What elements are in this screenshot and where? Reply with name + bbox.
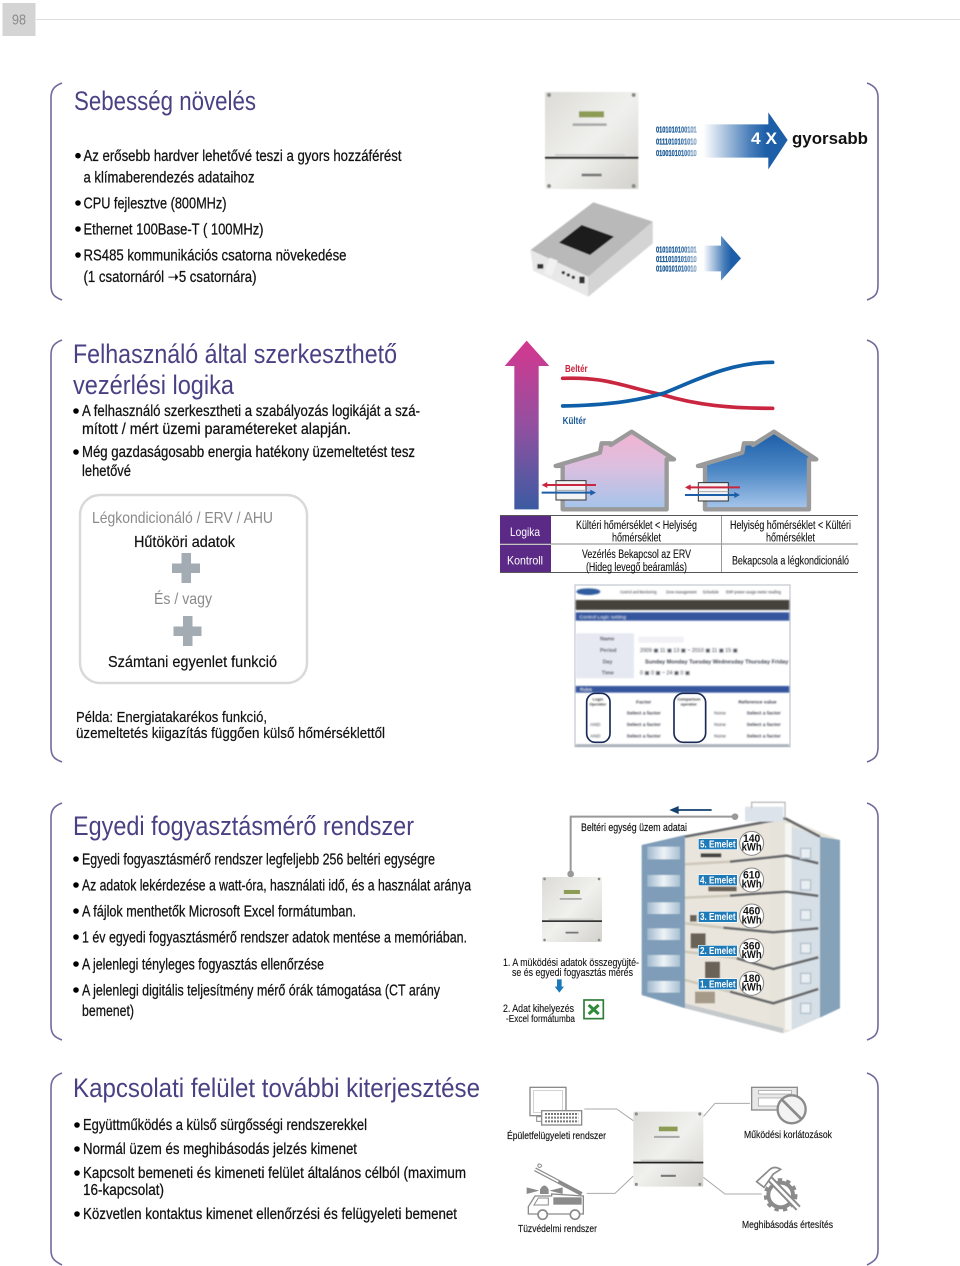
floor 1 reading <box>698 971 764 995</box>
floor 2 reading: 360 <box>743 940 760 952</box>
screenshot: control logic web page: Select a factor <box>627 722 661 728</box>
text block: metering bullets: Az adatok lekérdezése a watt-óra, használati idő, és a használat aránya <box>82 878 471 894</box>
floor 3 reading <box>698 904 764 928</box>
icon: house with air conditioner <box>685 432 816 509</box>
text block: metering bullets: 1 év egyedi fogyasztásmérő rendszer adatok mentése a memóriában. <box>82 930 467 946</box>
floor 4 reading: kWh <box>742 878 762 890</box>
text block: metering bullets: A fájlok menthetők Microsoft Excel formátumban. <box>82 904 356 920</box>
icon: controller small <box>542 877 602 942</box>
text block: logic bullets: Még gazdaságosabb energia hatékony üzemeltetést tesz <box>82 444 415 461</box>
screenshot: control logic web page: Sunday Monday Tuesday Wednesday Thursday Friday <box>645 659 788 665</box>
page number <box>2 3 960 36</box>
heading: individual metering: Egyedi fogyasztásmérő rendszer <box>73 811 414 841</box>
label: indoor: Beltér <box>565 364 588 375</box>
panel: individual metering <box>51 802 878 1040</box>
text block: metering bullets: bemenet) <box>82 1003 134 1020</box>
text block: step 1 <box>503 957 639 979</box>
rounded box: inputs: És / vagy <box>154 589 212 608</box>
floor 1 reading: kWh <box>742 982 762 994</box>
text block: example <box>76 709 385 742</box>
screenshot: control logic web page: None <box>714 722 726 728</box>
text block: logic bullets: mított / mért üzemi paramétereket alapján. <box>82 421 351 438</box>
text block: metering bullets: A jelenlegi digitális teljesítmény mérő órák támogatása (CT arány <box>82 982 440 1000</box>
curve: outdoor temperature <box>563 362 773 406</box>
chart: temperature logic diagram <box>505 341 816 509</box>
binary data stream top: 0111010101010 <box>656 136 697 147</box>
heading: user editable logic <box>73 339 397 400</box>
rounded box: inputs: Számtani egyenlet funkció <box>108 654 277 671</box>
screenshot: control logic web page: Reference value <box>738 699 777 705</box>
screenshot: control logic web page: Control and Monitoring <box>620 589 657 594</box>
text block: example: Példa: Energiatakarékos funkció, <box>76 709 267 726</box>
label: building management: Épületfelügyeleti rendszer <box>507 1129 606 1142</box>
screenshot: control logic web page: Operator <box>589 701 607 706</box>
icon: old controller box <box>531 202 653 297</box>
text block: metering bullets <box>73 852 471 1020</box>
icon: fault tools <box>757 1168 798 1210</box>
floor 4 reading <box>698 868 764 892</box>
floor 5 reading: kWh <box>742 842 762 854</box>
floor readings <box>698 831 764 995</box>
label: fire protection: Tüzvédelmi rendszer <box>518 1223 597 1235</box>
panel: interface extension <box>51 1073 878 1265</box>
text block: speed bullets: Ethernet 100Base-T ( 100MHz) <box>84 222 264 238</box>
text block: speed bullets: (1 csatornáról ➝5 csatornára) <box>84 269 256 286</box>
screenshot: control logic web page: Time <box>602 671 614 677</box>
label: fault notification: Meghibásodás értesítés <box>742 1219 833 1231</box>
icon: house with ERV <box>542 432 674 509</box>
screenshot: control logic web page: 2009 ▣ 11 ▣ 13 ▣ ~ 2010 ▣ 11 ▣ 15 ▣ <box>640 648 738 654</box>
text block: interface bullets: Kapcsolt bemeneti és kimeneti felület általános célból (maximum <box>83 1165 466 1182</box>
text block: step 1: 1. A müködési adatok összegyüjté- <box>503 957 639 969</box>
binary data stream top: 0101010100101 <box>656 124 697 135</box>
binary data stream top: 0100101010010 <box>656 148 697 158</box>
floor 2 reading: kWh <box>742 949 762 961</box>
floor 5 reading: 140 <box>743 833 760 845</box>
text block: speed bullets: Az erősebb hardver lehetővé teszi a gyors hozzáférést <box>84 148 402 165</box>
panel: speed increase <box>51 83 878 300</box>
text block: logic bullets: A felhasználó szerkesztheti a szabályozás logikáját a szá- <box>82 403 420 420</box>
table: logic and control: Helyiség hőmérséklet < Kültéri <box>730 520 851 532</box>
text block: speed bullets: RS485 kommunikációs csatorna növekedése <box>84 248 346 264</box>
binary data stream bottom: 0100101010010 <box>656 263 697 274</box>
icon: wall controller <box>545 92 638 189</box>
binary data stream bottom: 0101010100101 <box>656 244 697 255</box>
table: logic and control: Logika <box>510 525 540 539</box>
text block: interface bullets: Normál üzem és meghibásodás jelzés kimenet <box>83 1141 358 1158</box>
screenshot: control logic web page: Name <box>600 637 615 643</box>
rounded box: inputs <box>80 495 307 683</box>
icon: computer <box>530 1087 582 1125</box>
screenshot: control logic web page: EHP power usage meter reading <box>726 589 781 594</box>
heading: user editable logic: Felhasználó által szerkeszthető <box>73 339 397 369</box>
table: logic and control: Kültéri hőmérséklet < Helyiség <box>576 520 697 532</box>
screenshot: control logic web page: AND <box>590 722 601 728</box>
screenshot: control logic web page <box>575 585 790 747</box>
screenshot: control logic web page: Select a factor <box>747 711 781 717</box>
heading: speed increase: Sebesség növelés <box>74 86 256 116</box>
text block: step 2 <box>503 1003 575 1025</box>
icon: data line with arrow <box>567 806 738 877</box>
screenshot: control logic web page: Select a factor <box>747 733 781 739</box>
arrow: temperature axis <box>505 341 549 509</box>
floor 3 reading: kWh <box>742 914 762 926</box>
icon: operation restricted <box>752 1087 806 1123</box>
screenshot: control logic web page: Control Logic setting <box>579 614 626 620</box>
icon: download arrow <box>555 979 564 993</box>
curve: indoor temperature <box>563 378 773 408</box>
arrow: 4x faster: 4 X <box>751 129 778 148</box>
binary data stream top <box>656 124 697 158</box>
text block: speed bullets: a klímaberendezés adataihoz <box>84 170 254 186</box>
screenshot: control logic web page: Rules <box>580 687 593 692</box>
text block: speed bullets <box>75 148 402 286</box>
label: faster: gyorsabb <box>792 129 868 148</box>
table: logic and control: Vezérlés Bekapcsol az ERV <box>582 549 691 561</box>
floor 3 reading: 460 <box>743 906 760 918</box>
text block: speed bullets: CPU fejlesztve (800MHz) <box>84 196 226 212</box>
label: outdoor: Kültér <box>563 416 586 427</box>
heading: interface extension: Kapcsolati felület további kiterjesztése <box>73 1073 480 1103</box>
screenshot: control logic web page: Schedule <box>703 589 719 594</box>
text block: logic bullets: lehetővé <box>82 463 131 480</box>
floor 1 reading: 180 <box>743 973 760 985</box>
floor 2 reading <box>698 939 764 963</box>
table: logic and control: (Hideg levegő beáramlás) <box>586 562 687 574</box>
icon: excel <box>584 1000 603 1019</box>
diagram: controller connections <box>527 1087 806 1219</box>
text block: metering bullets: A jelenlegi tényleges fogyasztás ellenőrzése <box>82 956 324 974</box>
screenshot: control logic web page: operator <box>681 701 697 706</box>
screenshot: control logic web page: 0 ▣ 0 ▣ ~ 24 ▣ 0 ▣ <box>640 671 690 677</box>
text block: step 2: -Excel formátumba <box>506 1014 575 1025</box>
screenshot: control logic web page: Day <box>603 659 612 665</box>
floor 5 reading: 5. Emelet <box>700 839 736 850</box>
screenshot: control logic web page: Select a factor <box>627 733 661 739</box>
table: logic and control <box>500 516 858 574</box>
floor 3 reading: 3. Emelet <box>700 912 736 923</box>
floor 5 reading <box>698 831 764 855</box>
text block: example: üzemeltetés kiigazítás függően külső hőmérséklettől <box>76 725 385 742</box>
floor 4 reading: 4. Emelet <box>700 875 736 886</box>
table: logic and control: hőmérséklet <box>612 532 662 544</box>
table: logic and control: Kontroll <box>507 554 543 568</box>
screenshot: control logic web page: Select a factor <box>627 711 661 717</box>
binary data stream bottom <box>656 244 697 274</box>
text block: metering bullets: Egyedi fogyasztásmérő rendszer legfeljebb 256 beltéri egységre <box>82 852 435 868</box>
text block: step 1: se és egyedi fogyasztás mérés <box>512 967 633 979</box>
label: indoor unit data: Beltéri egység üzem adatai <box>581 822 687 834</box>
text block: interface bullets: Együttműködés a külső sürgősségi rendszerekkel <box>83 1117 367 1134</box>
screenshot: control logic web page: AND <box>590 733 601 739</box>
building <box>642 802 840 1033</box>
table: logic and control: hőmérséklet <box>766 532 816 544</box>
page number: 98 <box>12 12 26 28</box>
text block: step 2: 2. Adat kihelyezés <box>503 1003 574 1015</box>
label: operation restrictions: Működési korlátozások <box>744 1129 833 1141</box>
heading: user editable logic: vezérlési logika <box>73 370 235 400</box>
screenshot: control logic web page: Logic <box>593 697 604 702</box>
illustration: building metering <box>555 802 840 1033</box>
screenshot: control logic web page: Factor <box>636 699 651 705</box>
rounded box: inputs: Légkondicionáló / ERV / AHU <box>92 510 273 527</box>
connector lines <box>584 1103 762 1194</box>
screenshot: control logic web page: Select a factor <box>747 722 781 728</box>
arrow: base speed <box>703 236 741 281</box>
icon: controller <box>633 1112 703 1187</box>
screenshot: control logic web page: Zone management <box>666 589 697 594</box>
screenshot: control logic web page: None <box>714 733 726 739</box>
icon: fire truck <box>527 1164 583 1219</box>
rounded box: inputs: Hűtököri adatok <box>134 534 236 551</box>
arrow: 4x faster <box>703 112 788 169</box>
table: logic and control: Bekapcsola a légkondicionáló <box>732 556 849 568</box>
text block: interface bullets: 16-kapcsolat) <box>83 1182 164 1199</box>
text block: logic bullets <box>73 403 420 480</box>
binary data stream bottom: 0111010101010 <box>656 254 697 264</box>
floor 4 reading: 610 <box>743 870 760 882</box>
floor 2 reading: 2. Emelet <box>700 946 736 957</box>
text block: interface bullets <box>74 1117 466 1223</box>
panel: user editable logic <box>51 339 878 762</box>
screenshot: control logic web page: Period <box>600 648 617 654</box>
screenshot: control logic web page: None <box>714 711 726 717</box>
floor 1 reading: 1. Emelet <box>700 979 736 990</box>
screenshot: control logic web page: Comparison <box>677 697 701 702</box>
text block: interface bullets: Közvetlen kontaktus kimenet ellenőrzési és felügyeleti bemenet <box>83 1206 458 1223</box>
